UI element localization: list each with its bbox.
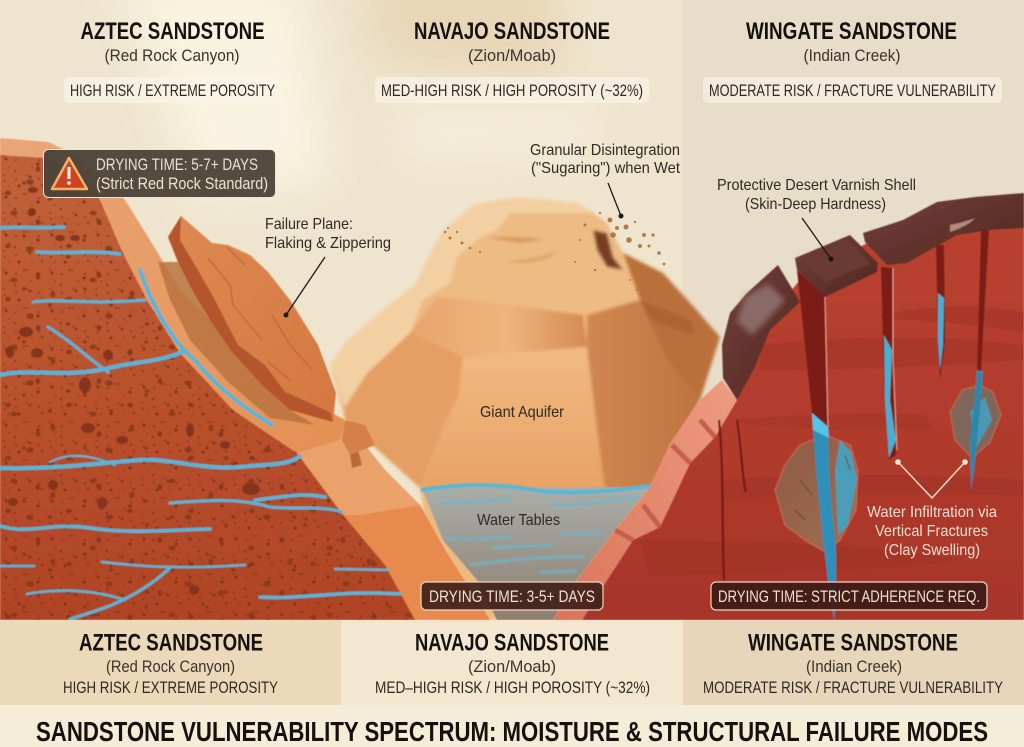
callout: desert varnish: (Skin-Deep Hardness) [745, 196, 886, 213]
footer panel: Navajo: NAVAJO SANDSTONE [415, 630, 609, 656]
footer panel: Wingate: WINGATE SANDSTONE [748, 630, 958, 656]
pink rim strip [553, 380, 737, 620]
crack 4 [936, 245, 945, 380]
header: Navajo: NAVAJO SANDSTONE [414, 18, 610, 45]
shell piece 1 [722, 265, 800, 400]
callout: water infiltration [867, 459, 997, 559]
header: Wingate [703, 18, 1002, 103]
aztec porous body [0, 155, 415, 620]
header: Aztec: HIGH RISK / EXTREME POROSITY [70, 81, 275, 100]
failure flake [168, 216, 336, 422]
crack 5 [977, 230, 989, 372]
illustration: Aztec rock [0, 138, 490, 620]
callout: failure plane [265, 216, 391, 318]
callout: Navajo drying time: DRYING TIME: 3-5+ DAYS [429, 587, 595, 606]
footer panel: Aztec [0, 620, 341, 705]
footer panel: Aztec: HIGH RISK / EXTREME POROSITY [63, 678, 278, 697]
header: Navajo [375, 18, 649, 103]
footer panel: Navajo [341, 620, 683, 705]
callout: water infiltration: Water Infiltration via [867, 504, 997, 521]
header: Navajo: (Zion/Moab) [468, 46, 556, 65]
callout: water infiltration: Vertical Fractures [875, 523, 988, 540]
label: water tables: Water Tables [477, 512, 560, 529]
callout: Wingate drying time [711, 582, 987, 610]
callout: failure plane: Failure Plane: [265, 216, 353, 233]
middle band [410, 297, 587, 357]
callout: granular disintegration: ("Sugaring") when Wet [531, 160, 681, 177]
footer panel: Aztec: AZTEC SANDSTONE [79, 630, 263, 656]
label: giant aquifer: Giant Aquifer [480, 404, 565, 421]
column crack 2 [797, 270, 828, 427]
thin cracks [719, 420, 746, 580]
footer panel: Navajo: (Zion/Moab) [468, 657, 556, 676]
swollen clay stone: small [950, 370, 1001, 490]
shell piece 2 [795, 235, 878, 297]
red strata [640, 307, 1024, 575]
central column [420, 347, 605, 490]
icon: warning triangle [52, 158, 87, 189]
aztec veins [0, 227, 400, 619]
callout: Aztec drying time: (Strict Red Rock Standard) [96, 174, 268, 193]
callout: Aztec drying time: DRYING TIME: 5-7+ DAYS [96, 155, 258, 174]
callout: failure plane: Flaking & Zippering [265, 235, 391, 252]
background panels [164, 0, 1024, 502]
illustration: Wingate rock [553, 193, 1024, 620]
shell piece 3 [863, 193, 1024, 265]
callout: granular disintegration [530, 142, 681, 218]
header: Wingate: WINGATE SANDSTONE [746, 18, 957, 45]
illustration: water table [421, 485, 650, 620]
callout: desert varnish: Protective Desert Varnish Shell [717, 177, 916, 194]
erosion hollow [593, 230, 623, 270]
sugaring grains [444, 212, 665, 291]
header: Aztec [64, 18, 281, 103]
aztec rim [0, 138, 490, 620]
callout: water infiltration: (Clay Swelling) [884, 542, 980, 559]
footer panel: Wingate: (Indian Creek) [806, 657, 902, 676]
footer panel: Aztec: (Red Rock Canyon) [106, 657, 235, 676]
swollen clay stone: large [775, 413, 858, 620]
right columns [587, 300, 700, 490]
header: Wingate: (Indian Creek) [804, 46, 900, 65]
footer panel: Wingate [683, 620, 1024, 705]
lower left [345, 333, 463, 488]
header: Aztec: AZTEC SANDSTONE [80, 18, 264, 45]
footer panel: Navajo: MED–HIGH RISK / HIGH POROSITY (~32%) [375, 678, 650, 697]
callout: Aztec drying time [44, 150, 276, 198]
upper tier [437, 213, 640, 315]
crack 3 [881, 267, 896, 460]
pale left tier [330, 197, 595, 407]
shadow under flake [158, 262, 315, 425]
callout: Navajo drying time [421, 582, 603, 610]
header: Aztec: (Red Rock Canyon) [104, 46, 240, 65]
callout: granular disintegration: Granular Disintegration [530, 142, 680, 159]
callout: desert varnish [717, 177, 916, 262]
illustration: Navajo mesa [330, 197, 720, 620]
header: Navajo: MED-HIGH RISK / HIGH POROSITY (~32%) [381, 81, 643, 100]
